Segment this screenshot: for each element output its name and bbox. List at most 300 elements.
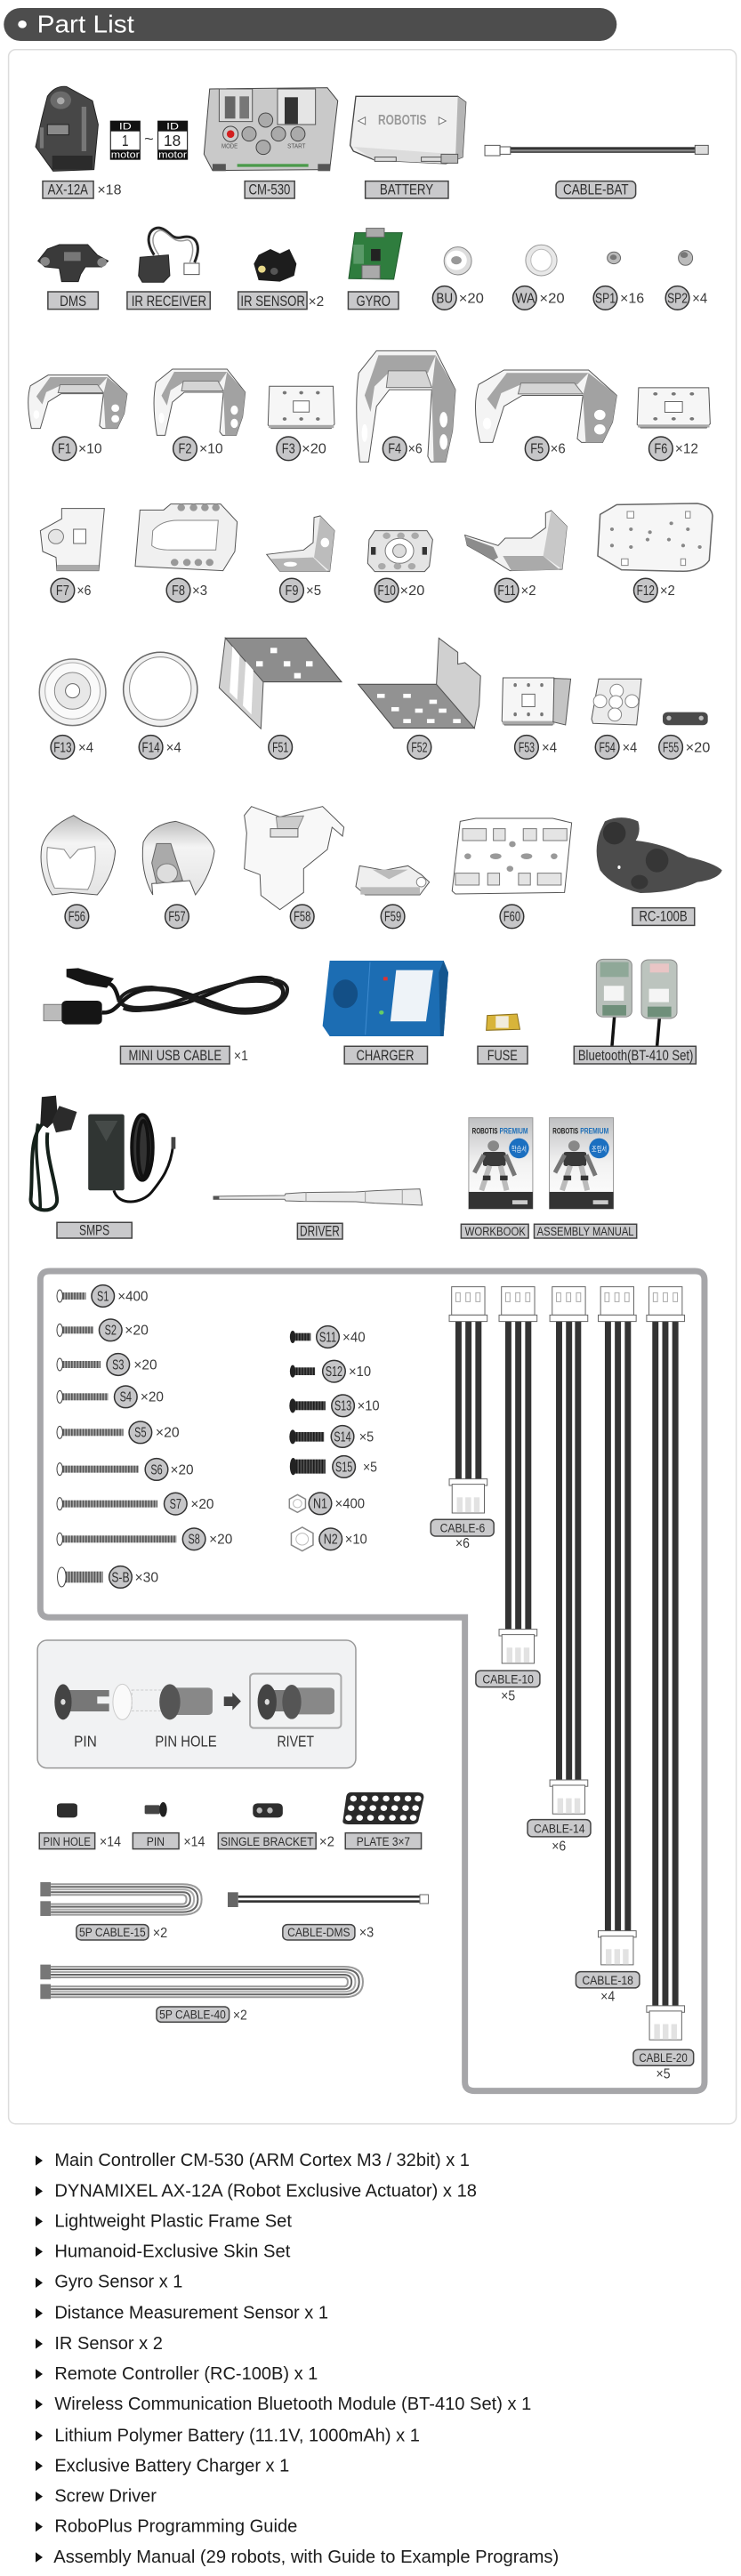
label: CABLE-6 x6: ×6 bbox=[455, 1535, 470, 1551]
icon: F6 plate bbox=[637, 388, 710, 428]
badge: F9 x5 bbox=[280, 578, 321, 602]
screw: S6 x20: S6 bbox=[150, 1462, 163, 1477]
screw: S8 x20: ×20 bbox=[209, 1531, 232, 1547]
nut: N2 x10: N2 bbox=[324, 1532, 338, 1547]
nut: N2 x10: ×10 bbox=[345, 1531, 367, 1547]
icon: F51 bracket bbox=[219, 638, 342, 729]
label: CABLE-DMS x3 bbox=[283, 1924, 374, 1940]
label: PIN HOLE x14: ×14 bbox=[100, 1833, 121, 1849]
label: ASSEMBLY MANUAL: ASSEMBLY MANUAL bbox=[537, 1224, 633, 1238]
badge: F2 x10: ×10 bbox=[199, 440, 223, 456]
badge: F3 x20 bbox=[277, 437, 326, 461]
label: CABLE-14 x6 bbox=[528, 1820, 591, 1854]
badge: F60 bbox=[500, 905, 524, 929]
outline frame bbox=[40, 1271, 705, 2091]
badge: F9 x5: F9 bbox=[286, 583, 298, 599]
badge: F4 x6 bbox=[383, 437, 423, 461]
icon: F57 helmet skin bbox=[142, 821, 214, 895]
label: CABLE-10 x5 bbox=[476, 1670, 540, 1703]
label: MINI USB CABLE x1: ×1 bbox=[234, 1048, 248, 1064]
icon: F60 plate bbox=[452, 818, 572, 894]
label: 5P CABLE-40 x2: 5P CABLE-40 bbox=[159, 2008, 226, 2021]
list item 11: Exclusive Battery Charger x 1 bbox=[54, 2455, 289, 2475]
label: BATTERY bbox=[366, 181, 448, 198]
label: GYRO bbox=[348, 292, 399, 310]
icon: workbook bbox=[469, 1118, 533, 1209]
nut: N1 x400: ×400 bbox=[335, 1495, 365, 1511]
icon: CM-530 controller: START bbox=[287, 143, 305, 150]
list item 5 bbox=[36, 2271, 182, 2291]
panel: pin and rivet diagram bbox=[37, 1640, 356, 1768]
label: CABLE-20 x5: ×5 bbox=[656, 2065, 671, 2081]
label: CABLE-6 x6 bbox=[431, 1519, 494, 1551]
icon: F1 bracket bbox=[28, 375, 127, 429]
badge: BU x20 bbox=[432, 286, 484, 310]
list item 8 bbox=[36, 2363, 318, 2383]
screw: S7 x20 bbox=[57, 1493, 214, 1515]
cable: 5P CABLE-40 ribbon bbox=[40, 1965, 363, 1999]
label: CABLE-DMS x3: ×3 bbox=[359, 1924, 374, 1940]
badge: F7 x6 bbox=[51, 578, 91, 602]
badge: F54 x4: F54 bbox=[600, 740, 616, 755]
badge: F1 x10: ×10 bbox=[78, 440, 102, 456]
badge: F11 x2: ×2 bbox=[521, 583, 536, 599]
badge: F53 x4: F53 bbox=[519, 740, 535, 755]
screw: S2 x20 bbox=[57, 1319, 149, 1341]
screw: S8 x20: S8 bbox=[188, 1532, 200, 1547]
icon: F52 bracket bbox=[358, 638, 480, 729]
list item 13: RoboPlus Programming Guide bbox=[54, 2516, 297, 2536]
label: PIN HOLE x14: PIN HOLE bbox=[44, 1834, 91, 1848]
badge: F14 x4 bbox=[139, 736, 181, 759]
badge: WA x20 bbox=[512, 286, 565, 310]
badge: F4 x6: F4 bbox=[388, 441, 401, 456]
badge: F6 x12: ×12 bbox=[675, 440, 698, 456]
icon: F11 foot frame bbox=[465, 511, 567, 571]
badge: F11 x2 bbox=[495, 578, 536, 602]
badge: F5 x6 bbox=[525, 437, 566, 461]
list item 12 bbox=[36, 2485, 157, 2506]
badge: F4 x6: ×6 bbox=[408, 440, 423, 456]
badge: BU x20: ×20 bbox=[459, 290, 484, 306]
icon: assembly manual: PREMIUM bbox=[580, 1126, 608, 1136]
badge: F55 x20 bbox=[659, 736, 710, 759]
label: MINI USB CABLE x1 bbox=[120, 1046, 248, 1064]
badge: F60: F60 bbox=[503, 909, 520, 924]
icon: F8 frame bbox=[135, 504, 238, 571]
badge: SP1 x16: ×16 bbox=[620, 290, 644, 306]
icon: ID 1 motor tag: 1 bbox=[122, 132, 129, 149]
list item 7 bbox=[36, 2332, 163, 2353]
badge: SP2 x4: SP2 bbox=[667, 291, 688, 306]
section: pin parts and ribbon cables bbox=[37, 1640, 429, 2023]
label: 5P CABLE-15 x2: 5P CABLE-15 bbox=[79, 1925, 146, 1939]
label: CABLE-BAT bbox=[556, 181, 636, 198]
screw: S6 x20: ×20 bbox=[170, 1461, 194, 1477]
badge: F54 x4: ×4 bbox=[623, 739, 637, 755]
badge: F10 x20 bbox=[375, 578, 424, 602]
nut: N1 x400: N1 bbox=[313, 1496, 327, 1511]
badge: F57 bbox=[165, 905, 189, 929]
screw: S11 x40 bbox=[290, 1326, 366, 1348]
icon: battery: ROBOTIS bbox=[378, 112, 426, 128]
list item 1: Main Controller CM-530 (ARM Cortex M3 / 32bit) x 1 bbox=[54, 2149, 470, 2169]
icon: F12 base plate bbox=[598, 503, 713, 571]
list item 7: IR Sensor x 2 bbox=[54, 2332, 163, 2353]
icon: CM-530 controller bbox=[204, 88, 338, 171]
label: 5P CABLE-15 x2: ×2 bbox=[153, 1925, 167, 1941]
screw: S14 x5: ×5 bbox=[359, 1429, 374, 1445]
label: AX-12A x18: ×18 bbox=[97, 181, 122, 197]
label: CABLE-18 x4: ×4 bbox=[600, 1988, 615, 2004]
section: skins and accessories: DRIVER bbox=[300, 1222, 340, 1239]
icon: F54 plate bbox=[592, 679, 641, 725]
list item 4 bbox=[36, 2241, 291, 2261]
label: CABLE-14 x6: ×6 bbox=[552, 1838, 566, 1854]
label: SINGLE BRACKET x2 bbox=[218, 1833, 334, 1849]
cable: CABLE-DMS bbox=[228, 1892, 429, 1907]
screw: S4 x20: S4 bbox=[120, 1389, 132, 1405]
label: CABLE-20 x5 bbox=[633, 2049, 694, 2081]
badge: F2 x10: F2 bbox=[179, 441, 191, 456]
screw: S13 x10: S13 bbox=[334, 1398, 351, 1413]
screw: S3 x20: ×20 bbox=[133, 1356, 157, 1373]
label: CHARGER bbox=[344, 1046, 428, 1064]
label: BATTERY: BATTERY bbox=[380, 181, 433, 197]
icon: fuse bbox=[487, 1014, 520, 1030]
label: FUSE: FUSE bbox=[487, 1047, 518, 1064]
icon: F56 helmet skin bbox=[41, 816, 116, 895]
badge: F10 x20: ×20 bbox=[400, 583, 424, 599]
label: CABLE-BAT: CABLE-BAT bbox=[563, 181, 629, 197]
icon: ID 1 motor tag: ID bbox=[119, 122, 132, 133]
screw: S8 x20 bbox=[57, 1528, 232, 1550]
label: PIN HOLE: PIN HOLE bbox=[155, 1733, 217, 1751]
cable: CABLE-6 bbox=[449, 1287, 487, 1513]
label: CABLE-10 x5: ×5 bbox=[501, 1687, 515, 1703]
list item 3: Lightweight Plastic Frame Set bbox=[54, 2210, 292, 2231]
badge: F3 x20: F3 bbox=[282, 441, 295, 456]
badge: F58: F58 bbox=[294, 909, 310, 924]
screw: S11 x40: S11 bbox=[319, 1330, 336, 1345]
icon: SP2 spacer bbox=[679, 251, 693, 265]
cable: CABLE-10 bbox=[499, 1287, 537, 1663]
icon: ID 1 motor tag bbox=[110, 121, 141, 160]
screw: S1 x400 bbox=[57, 1285, 148, 1307]
icon: pin bbox=[54, 1684, 110, 1719]
screw: S12 x10 bbox=[290, 1360, 371, 1382]
badge: F56: F56 bbox=[68, 909, 85, 924]
label: Bluetooth(BT-410 Set) bbox=[574, 1046, 696, 1064]
label: IR SENSOR x2: IR SENSOR bbox=[240, 293, 305, 310]
badge: F2 x10 bbox=[173, 437, 223, 461]
icon: RC-100B remote bbox=[597, 817, 722, 893]
badge: F10 x20: F10 bbox=[378, 583, 396, 599]
badge: F55 x20: ×20 bbox=[686, 739, 710, 755]
list item 11 bbox=[36, 2455, 289, 2475]
screw: S7 x20: ×20 bbox=[190, 1496, 214, 1512]
label: ASSEMBLY MANUAL bbox=[534, 1224, 637, 1238]
badge: F53 x4: ×4 bbox=[542, 739, 557, 755]
label: CABLE-10 x5: CABLE-10 bbox=[482, 1672, 534, 1686]
badge: F12 x2 bbox=[633, 578, 675, 602]
label: IR RECEIVER: IR RECEIVER bbox=[132, 293, 206, 310]
list item 6 bbox=[36, 2302, 328, 2322]
badge: F13 x4: ×4 bbox=[78, 739, 93, 755]
icon: F3 plate bbox=[268, 386, 334, 429]
label: DRIVER bbox=[297, 1222, 342, 1239]
badge: F8 x3: ×3 bbox=[192, 583, 207, 599]
badge: F14 x4: ×4 bbox=[166, 739, 181, 755]
icon: F10 octagon frame bbox=[367, 531, 432, 572]
icon: single bracket bbox=[253, 1803, 283, 1817]
label: PIN x14: PIN bbox=[147, 1834, 165, 1848]
screw: S15 x5 bbox=[290, 1456, 377, 1477]
badge: F54 x4 bbox=[595, 736, 637, 759]
list item 4: Humanoid-Exclusive Skin Set bbox=[54, 2241, 291, 2261]
badge: F13 x4 bbox=[51, 736, 93, 759]
icon: F53 plate bbox=[502, 678, 571, 725]
screw: S13 x10 bbox=[289, 1395, 380, 1417]
label: CABLE-18 x4 bbox=[576, 1972, 640, 2004]
screw: S5 x20 bbox=[57, 1421, 180, 1444]
label: CM-530 bbox=[245, 181, 294, 198]
label: SMPS bbox=[57, 1222, 132, 1238]
badge: WA x20: ×20 bbox=[539, 290, 565, 306]
icon: assembly manual: 조립서 bbox=[592, 1145, 607, 1154]
label: SMPS: SMPS bbox=[79, 1222, 109, 1238]
list item 12: Screw Driver bbox=[54, 2485, 157, 2506]
label: RC-100B bbox=[632, 908, 695, 925]
label: CM-530: CM-530 bbox=[248, 181, 290, 197]
label: PLATE 3x7 bbox=[345, 1833, 422, 1849]
icon: F5 bracket bbox=[475, 370, 616, 442]
title bar bbox=[4, 8, 616, 41]
badge: F52: F52 bbox=[411, 740, 428, 755]
badge: F5 x6: F5 bbox=[530, 441, 544, 456]
badge: F12 x2: ×2 bbox=[660, 583, 675, 599]
list item 2 bbox=[36, 2180, 477, 2201]
icon: IR receiver bbox=[139, 228, 199, 282]
badge: SP1 x16: SP1 bbox=[595, 291, 616, 306]
screw: S12 x10: S12 bbox=[326, 1364, 342, 1380]
label: FUSE bbox=[478, 1046, 528, 1064]
badge: F11 x2: F11 bbox=[497, 583, 516, 599]
screw: S-B x30: ×30 bbox=[134, 1569, 158, 1585]
list item 13 bbox=[36, 2516, 297, 2536]
label: GYRO: GYRO bbox=[357, 293, 391, 310]
list item 6: Distance Measurement Sensor x 1 bbox=[54, 2302, 328, 2322]
icon: screwdriver bbox=[213, 1189, 423, 1205]
badge: F52 bbox=[407, 736, 431, 759]
icon: AX-12A servo bbox=[36, 86, 98, 171]
badge: F5 x6: ×6 bbox=[551, 440, 566, 456]
label: AX-12A x18: AX-12A bbox=[48, 181, 88, 197]
badge: SP2 x4 bbox=[665, 286, 707, 310]
icon: ID 18 motor tag: motor bbox=[158, 149, 187, 160]
icon: ID 18 motor tag: ID bbox=[166, 122, 179, 133]
screw: S5 x20: ×20 bbox=[156, 1424, 180, 1440]
icon: mini USB cable bbox=[44, 968, 287, 1025]
screw: S-B x30: S-B bbox=[111, 1570, 130, 1585]
badge: F55 x20: F55 bbox=[663, 740, 679, 755]
badge: F12 x2: F12 bbox=[637, 583, 655, 599]
label: CABLE-6 x6: CABLE-6 bbox=[440, 1521, 485, 1535]
icon: SMPS power supply bbox=[31, 1096, 175, 1210]
badge: F59 bbox=[381, 905, 405, 929]
label: PIN x14: ×14 bbox=[183, 1833, 205, 1849]
screw: S2 x20: ×20 bbox=[125, 1322, 149, 1338]
icon: workbook: 학습서 bbox=[511, 1146, 527, 1154]
icon: F9 angle bracket bbox=[267, 516, 334, 571]
list item 1 bbox=[36, 2149, 470, 2169]
nut: N1 x400 bbox=[289, 1493, 365, 1515]
list item 9 bbox=[36, 2393, 531, 2413]
label: 5P CABLE-15 x2 bbox=[77, 1925, 167, 1941]
label: PLATE 3x7: PLATE 3×7 bbox=[357, 1834, 410, 1848]
label: PIN: PIN bbox=[74, 1733, 97, 1751]
label: CABLE-14 x6: CABLE-14 bbox=[534, 1822, 585, 1836]
badge: SP1 x16 bbox=[593, 286, 644, 310]
icon: F58 chest skin bbox=[245, 807, 344, 910]
label: SINGLE BRACKET x2: ×2 bbox=[319, 1833, 334, 1849]
label: RC-100B: RC-100B bbox=[639, 908, 688, 924]
icon: charger bbox=[323, 961, 448, 1036]
icon: BU bush bbox=[444, 247, 471, 275]
screw: S14 x5: S14 bbox=[334, 1429, 351, 1445]
label: CABLE-DMS x3: CABLE-DMS bbox=[287, 1925, 350, 1939]
label: CABLE-18 x4: CABLE-18 bbox=[582, 1973, 633, 1987]
screw: S13 x10: ×10 bbox=[358, 1397, 380, 1413]
icon: black pin hole bbox=[57, 1803, 77, 1817]
icon: ID 18 motor tag: 18 bbox=[164, 132, 181, 149]
label: IR SENSOR x2: ×2 bbox=[309, 294, 324, 310]
badge: F7 x6: ×6 bbox=[77, 583, 91, 599]
cable: CABLE-18 bbox=[598, 1287, 636, 1965]
screw: S1 x400: S1 bbox=[97, 1289, 109, 1304]
section: skins and accessories bbox=[31, 807, 722, 1239]
component list bbox=[36, 2149, 559, 2566]
icon: battery bbox=[350, 96, 466, 164]
screw: S5 x20: S5 bbox=[134, 1425, 147, 1440]
panel: parts background bbox=[9, 50, 737, 2124]
screw: S2 x20: S2 bbox=[105, 1323, 117, 1338]
icon: rivet bbox=[250, 1674, 341, 1728]
badge: F3 x20: ×20 bbox=[302, 440, 326, 456]
list item 2: DYNAMIXEL AX-12A (Robot Exclusive Actuator) x 18 bbox=[54, 2180, 477, 2201]
badge: F13 x4: F13 bbox=[53, 740, 72, 755]
icon: CM-530 controller: MODE bbox=[221, 143, 238, 150]
icon: F2 bracket bbox=[154, 369, 246, 435]
screw: S12 x10: ×10 bbox=[349, 1364, 371, 1380]
label: WORKBOOK bbox=[461, 1224, 528, 1238]
screw: S15 x5: ×5 bbox=[363, 1459, 377, 1475]
badge: F59: F59 bbox=[384, 909, 401, 924]
icon: workbook: PREMIUM bbox=[500, 1126, 528, 1136]
screw: S6 x20 bbox=[57, 1459, 194, 1480]
badge: F51 bbox=[269, 736, 293, 759]
section: screws and cables frame bbox=[40, 1271, 705, 2091]
label: 5P CABLE-40 x2: ×2 bbox=[233, 2007, 247, 2023]
badge: F9 x5: ×5 bbox=[306, 583, 321, 599]
label: MINI USB CABLE x1: MINI USB CABLE bbox=[129, 1047, 221, 1064]
icon: WA washer bbox=[526, 245, 557, 276]
icon: battery cable bbox=[485, 145, 708, 156]
section: frames F1 to F55 bbox=[28, 350, 713, 759]
icon: ID 18 motor tag bbox=[157, 121, 188, 160]
label: IR SENSOR x2 bbox=[238, 292, 324, 310]
label: DMS: DMS bbox=[60, 293, 86, 310]
cable: 5P CABLE-15 ribbon bbox=[40, 1882, 202, 1916]
icon: F55 link bbox=[663, 712, 708, 725]
badge: F6 x12 bbox=[649, 437, 698, 461]
icon: gyro board bbox=[349, 229, 402, 279]
icon: F7 frame bbox=[40, 509, 104, 571]
icon: F59 clip bbox=[356, 865, 430, 895]
icon: plate 3x7 bbox=[342, 1792, 423, 1824]
icon: F4 bracket bbox=[357, 350, 455, 462]
badge: SP2 x4: ×4 bbox=[692, 290, 707, 306]
screw: S3 x20 bbox=[57, 1354, 157, 1375]
icon: IR sensor bbox=[254, 249, 296, 282]
label: DMS bbox=[48, 292, 98, 310]
tilde: ~ bbox=[144, 131, 154, 147]
icon: F14 ring bbox=[124, 652, 197, 727]
badge: F57: F57 bbox=[168, 909, 186, 924]
icon: pin hole bbox=[113, 1684, 213, 1719]
label: WORKBOOK: WORKBOOK bbox=[465, 1224, 526, 1238]
badge: F8 x3 bbox=[166, 578, 207, 602]
icon: ID 1 motor tag: motor bbox=[111, 149, 140, 160]
badge: F51: F51 bbox=[272, 740, 288, 755]
screw: S14 x5 bbox=[289, 1426, 374, 1447]
badge: BU x20: BU bbox=[436, 291, 453, 306]
icon: workbook: ROBOTIS bbox=[472, 1126, 497, 1136]
list item 10: Lithium Polymer Battery (11.1V, 1000mAh) x 1 bbox=[54, 2425, 420, 2445]
screw: S1 x400: ×400 bbox=[117, 1288, 148, 1304]
list item 10 bbox=[36, 2425, 420, 2445]
screw: S3 x20: S3 bbox=[112, 1357, 124, 1373]
arrow bbox=[224, 1693, 241, 1711]
label: PIN x14 bbox=[133, 1833, 205, 1849]
label: IR RECEIVER bbox=[127, 292, 210, 310]
icon: SP1 spacer bbox=[608, 252, 621, 264]
screw: S-B x30 bbox=[58, 1566, 158, 1588]
badge: F58 bbox=[290, 905, 314, 929]
badge: F7 x6: F7 bbox=[56, 583, 69, 599]
list item 5: Gyro Sensor x 1 bbox=[54, 2271, 182, 2291]
icon: assembly manual bbox=[550, 1118, 614, 1209]
section: electronics rows bbox=[36, 86, 708, 310]
label: CHARGER: CHARGER bbox=[357, 1047, 415, 1064]
screw: S7 x20: S7 bbox=[170, 1496, 181, 1512]
icon: F13 wheel bbox=[39, 659, 106, 726]
badge: F6 x12: F6 bbox=[654, 441, 667, 456]
list item 8: Remote Controller (RC-100B) x 1 bbox=[54, 2363, 318, 2383]
label: CABLE-20 x5: CABLE-20 bbox=[639, 2050, 688, 2065]
screw: S15 x5: S15 bbox=[335, 1460, 352, 1475]
badge: F56 bbox=[65, 905, 89, 929]
badge: F14 x4: F14 bbox=[141, 740, 160, 755]
screw: S4 x20 bbox=[57, 1386, 164, 1408]
icon: Bluetooth modules bbox=[596, 959, 677, 1046]
icon: assembly manual: ROBOTIS bbox=[552, 1126, 578, 1136]
icon: DMS sensor bbox=[38, 245, 109, 282]
panel: pin and rivet diagram: RIVET bbox=[277, 1733, 314, 1751]
screw: S4 x20: ×20 bbox=[141, 1389, 164, 1405]
list item 3 bbox=[36, 2210, 292, 2231]
cable: CABLE-14 bbox=[550, 1287, 588, 1814]
